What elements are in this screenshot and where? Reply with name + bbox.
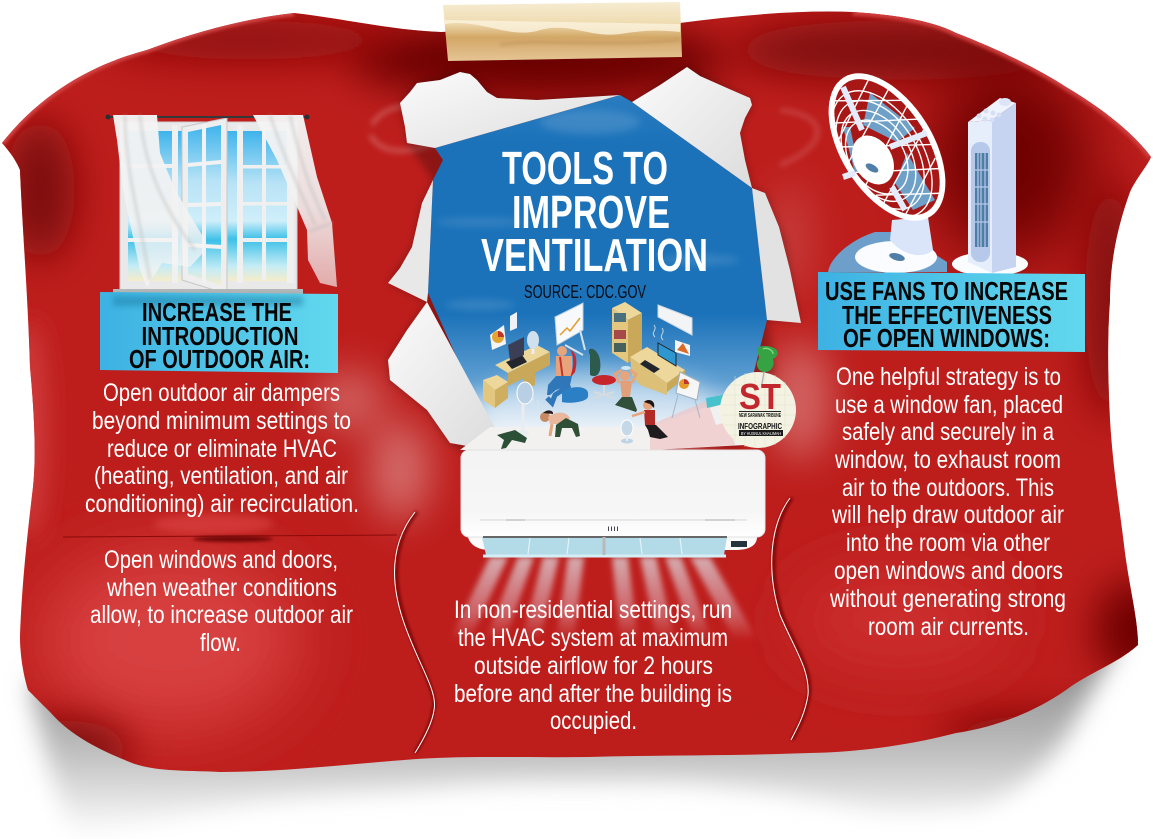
blue light streaks [435,110,740,310]
torn hole with blue background [388,67,801,460]
text block: open windows: when weather conditions [106,574,337,602]
crawling man [540,410,580,437]
text block: window fan strategy: One helpful strategy is to [836,363,1061,391]
title: TOOLS TO [502,142,668,194]
callout: pin and ST infographic badge: NEW SARAWAK TRIBUNE [739,413,781,419]
right window mullions [128,125,294,283]
paper flap: upper left [400,72,620,148]
standing fan [515,382,539,436]
paper flap: upper right [632,67,752,188]
heading box: use fans [818,272,1085,353]
cloth drop shadow [30,640,1120,836]
text block: window fan strategy [829,363,1066,641]
fold line: horizontal [63,535,397,542]
fan grill [805,53,969,241]
title [481,142,708,281]
paper floor [460,395,745,450]
text block: non-residential settings: the HVAC system at maximum [458,624,728,652]
callout: pin and ST infographic badge: ST [739,376,781,417]
text block: open windows: flow. [200,629,241,657]
heading box: increase outdoor air: OF OUTDOOR AIR: [129,344,310,374]
cool air streams [450,557,757,640]
fold line: right curtain crease [772,498,809,740]
text block: dampers: reduce or eliminate HVAC [107,435,337,463]
heading box: increase outdoor air [100,292,338,374]
seated man [547,346,576,403]
chair [589,349,616,398]
fan mesh [834,80,939,215]
bookshelf [612,302,642,363]
flip chart [672,372,700,418]
text block: open windows [90,546,353,657]
sill [113,289,303,297]
text block: window fan strategy: will help draw outdoor air [831,501,1064,529]
fan spokes [843,87,927,210]
tape [443,2,682,61]
text block: window fan strategy: room air currents. [868,613,1029,641]
right desk [630,340,690,395]
fan blades [843,93,935,210]
text block: dampers: beyond minimum settings to [92,407,351,435]
heading box: increase outdoor air: INTRODUCTION [142,321,298,351]
paper flap: lower left [388,302,495,450]
floor jacket [497,430,527,449]
wall pictures [490,312,517,350]
teal tag [706,394,728,408]
floor fan [621,420,633,444]
icon: air conditioner [450,450,765,640]
title: VENTILATION [481,229,708,281]
text block: window fan strategy: without generating strong [829,585,1066,613]
fold line: left curtain crease [394,512,435,753]
kneeling woman [632,400,668,439]
fan hub [844,128,902,192]
left desk [483,331,550,408]
left curtain [113,115,205,287]
blue bag [562,387,588,403]
text block: non-residential settings [454,596,732,735]
text block: open windows: Open windows and doors, [104,546,338,574]
callout: pin and ST infographic badge: INFOGRAPHIC [738,422,782,431]
text block: window fan strategy: window, to exhaust room [834,446,1061,474]
text block: non-residential settings: In non-residential settings, run [454,596,732,624]
text block: non-residential settings: outside airflow for 2 hours [474,652,713,680]
icon: tower fan [952,98,1028,276]
curtain rod [108,116,307,118]
title: IMPROVE [512,186,670,238]
icon: desk fan [828,73,947,273]
heading box: use fans: USE FANS TO INCREASE [825,276,1068,306]
text block: dampers [85,379,359,518]
heading box: use fans: THE EFFECTIVENESS [842,300,1052,330]
green push pin [757,346,778,384]
blue panel [428,95,767,432]
text block: window fan strategy: open windows and doors [834,557,1063,585]
text block: dampers: Open outdoor air dampers [103,379,340,407]
text block: non-residential settings: occupied. [550,707,637,735]
heading box: use fans: OF OPEN WINDOWS: [843,323,1050,353]
callout: pin and ST infographic badge: BY HUSNUL KHALIMAH [741,431,781,436]
icon: air conditioner: IIII [607,527,620,533]
text block: open windows: allow, to increase outdoor air [90,601,353,629]
text block: window fan strategy: into the room via other [846,529,1050,557]
text block: window fan strategy: air to the outdoors. This [842,474,1054,502]
kneeling man [615,366,637,412]
open sash [182,118,227,294]
paper flap: right [752,188,801,323]
badge circle [720,372,796,448]
icon: open window with curtains [106,114,337,297]
fan base [828,232,947,272]
heading box: increase outdoor air: INCREASE THE [142,297,292,327]
text block: non-residential settings: before and after the building is [454,680,732,708]
whiteboard [555,303,585,355]
text block: window fan strategy: use a window fan, placed [835,391,1063,419]
text block: dampers: conditioning) air recirculation. [85,490,359,518]
source credit: SOURCE: CDC.GOV [524,282,646,302]
callout: pin and ST infographic badge [706,346,796,448]
illustration: office with overheated workers [483,302,700,449]
window frame [120,122,297,290]
right curtain [253,115,337,287]
paper flap: left [388,180,433,302]
text block: dampers: (heating, ventilation, and air [94,462,348,490]
text block: window fan strategy: safely and securely in a [842,418,1054,446]
wall air conditioner [653,305,692,340]
